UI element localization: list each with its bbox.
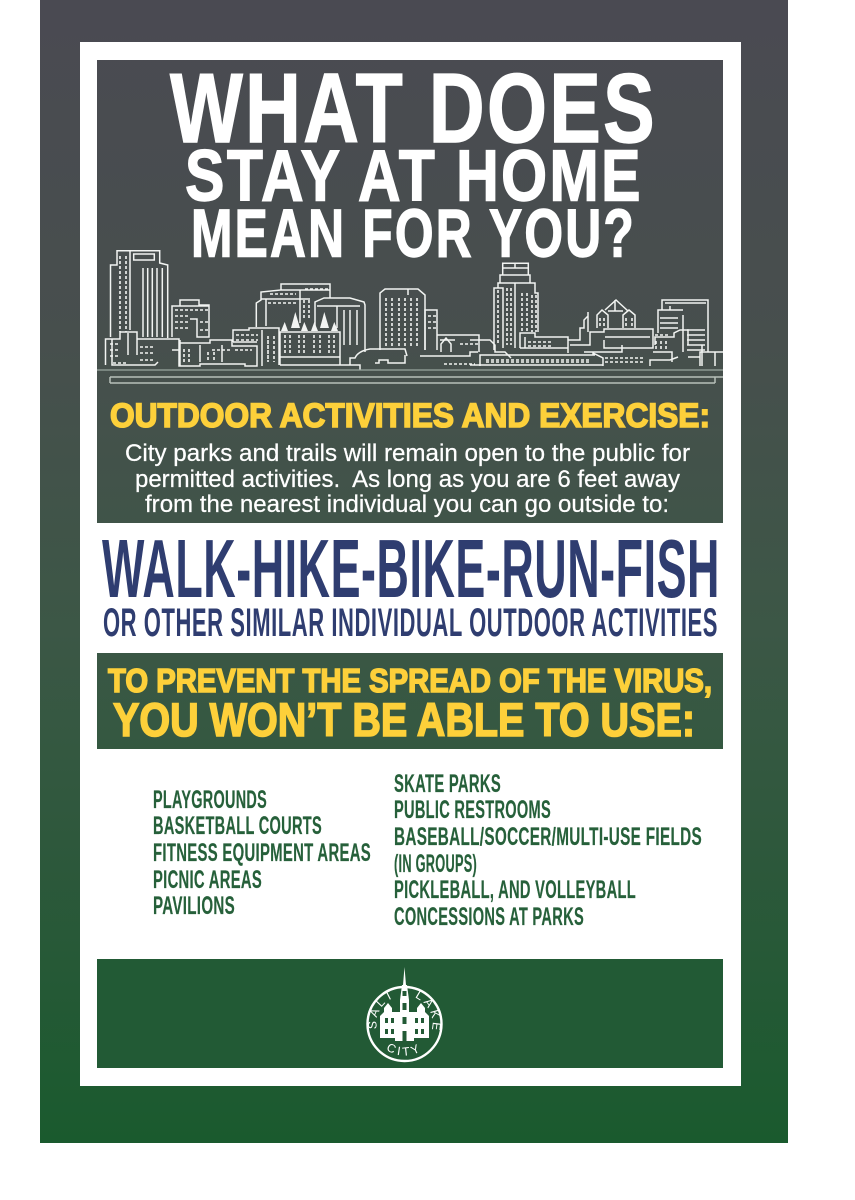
white frame: [80, 42, 741, 1086]
center tower: [470, 263, 603, 366]
list: closed facilities right: PICKLEBALL, AND VOLLEYBALL: [394, 876, 636, 904]
banner: closures warning: [97, 653, 723, 749]
banner: closures warning: TO PREVENT THE SPREAD OF THE VIRUS,: [108, 662, 712, 699]
list: closed facilities left: [153, 786, 371, 920]
list: closed facilities left: BASKETBALL COURTS: [153, 812, 322, 840]
logo: Salt Lake City seal: LAKE: [416, 991, 440, 1030]
heading: outdoor activities: OUTDOOR ACTIVITIES AND EXERCISE:: [110, 397, 710, 435]
list: closed facilities left: PLAYGROUNDS: [153, 786, 267, 814]
list: closed facilities left: PICNIC AREAS: [153, 866, 262, 894]
list: closed facilities right: (IN GROUPS): [394, 850, 477, 878]
paragraph: permitted activities: [125, 440, 690, 518]
temple and downtown cluster: [233, 284, 511, 370]
list: closed facilities right: SKATE PARKS: [394, 770, 501, 798]
list: closed facilities right: [394, 770, 702, 931]
footer band: [97, 959, 723, 1068]
title: MEAN FOR YOU?: [191, 195, 636, 271]
panel: header and outdoor activities: [97, 53, 723, 523]
list: closed facilities right: CONCESSIONS AT PARKS: [394, 903, 584, 931]
banner: closures warning: YOU WON’T BE ABLE TO USE:: [113, 693, 695, 746]
list: closed facilities right: PUBLIC RESTROOMS: [394, 796, 551, 824]
left tower: [106, 251, 257, 366]
list: closed facilities left: FITNESS EQUIPMENT AREAS: [153, 839, 371, 867]
headline: permitted activities: [102, 522, 720, 645]
paragraph: permitted activities: from the nearest individual you can go outside to:: [145, 491, 669, 518]
title: [170, 53, 657, 271]
title: STAY AT HOME: [185, 136, 643, 216]
list: closed facilities left: PAVILIONS: [153, 892, 235, 920]
skyline illustration: [97, 251, 723, 383]
paragraph: permitted activities: permitted activities. As long as you are 6 feet away: [135, 466, 680, 493]
title: WHAT DOES: [170, 53, 657, 163]
paragraph: permitted activities: City parks and trails will remain open to the public for: [125, 440, 690, 467]
logo: Salt Lake City seal: SALT: [368, 991, 391, 1029]
right buildings: [568, 300, 723, 366]
logo: Salt Lake City seal: [366, 968, 443, 1062]
logo: Salt Lake City seal: CITY: [388, 1044, 418, 1056]
